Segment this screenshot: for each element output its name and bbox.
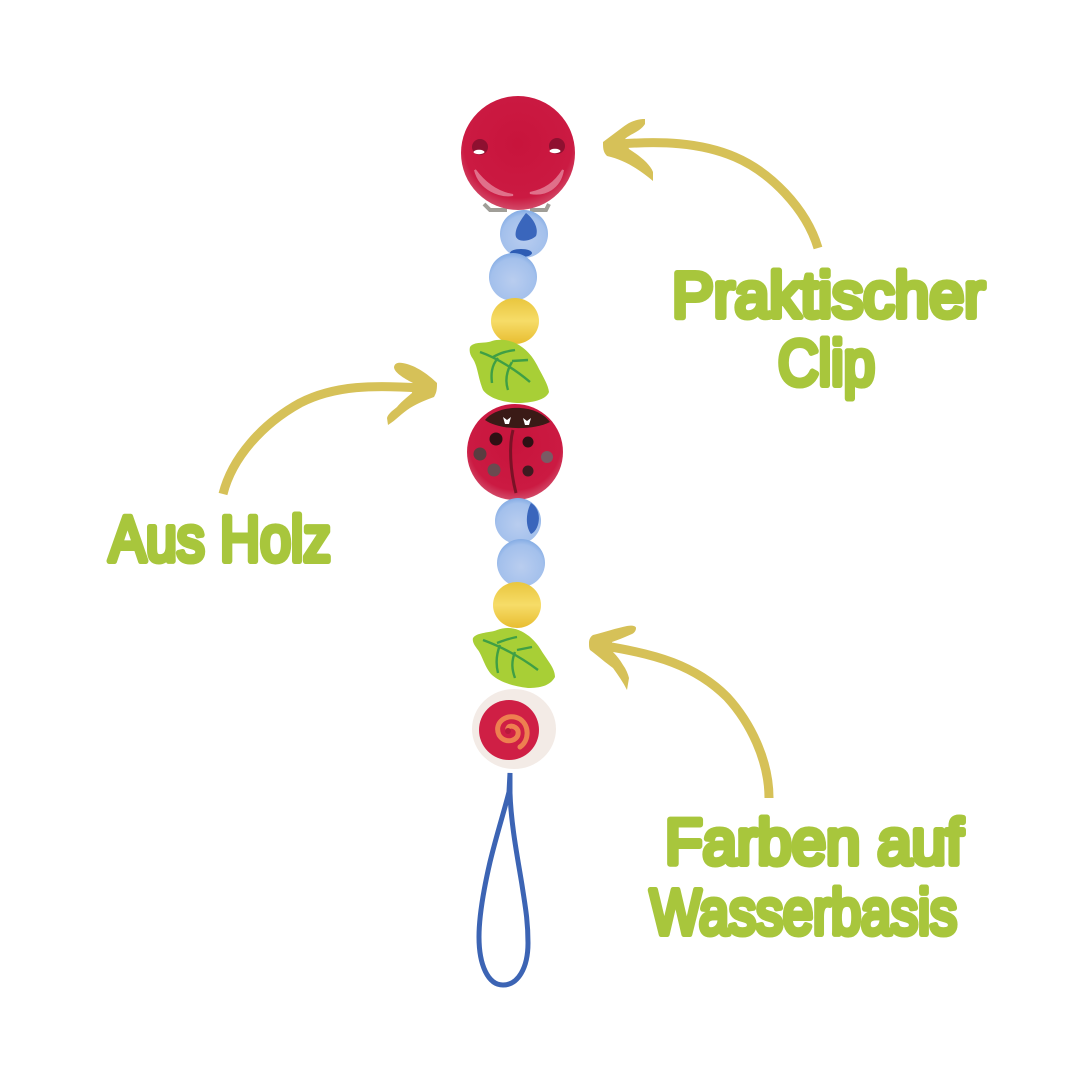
- label: Praktischer Clip: [672, 259, 985, 399]
- arrow: to colours: [589, 626, 769, 798]
- pacifier chain: [461, 96, 575, 985]
- icon: blue bead: [489, 253, 537, 301]
- icon: blue bead with hole: [500, 210, 548, 258]
- icon: green leaf: [473, 628, 555, 688]
- icon: metal clip: [484, 204, 549, 210]
- icon: blue bead: [497, 539, 545, 587]
- icon: yellow bead: [493, 582, 541, 628]
- label: Aus Holz: Aus Holz: [109, 503, 331, 575]
- icon: yellow bead: [491, 298, 539, 344]
- label: Farben auf Wasserbasis: Wasserbasis: [650, 876, 957, 948]
- label: Praktischer Clip: Praktischer: [672, 259, 985, 331]
- arrow: to wood beads: [223, 363, 437, 494]
- icon: blue bead with hole: [495, 498, 541, 544]
- label: Farben auf Wasserbasis: [650, 806, 963, 948]
- label: Praktischer Clip: Clip: [778, 327, 875, 399]
- arrow: to clip: [603, 119, 818, 248]
- icon: green leaf: [470, 340, 549, 403]
- icon: red wooden clip: [461, 96, 575, 210]
- icon: spiral bead: [472, 689, 556, 769]
- icon: ladybug bead: [467, 404, 563, 500]
- label: Farben auf Wasserbasis: Farben auf: [665, 806, 963, 878]
- icon: loop cord: [479, 773, 528, 985]
